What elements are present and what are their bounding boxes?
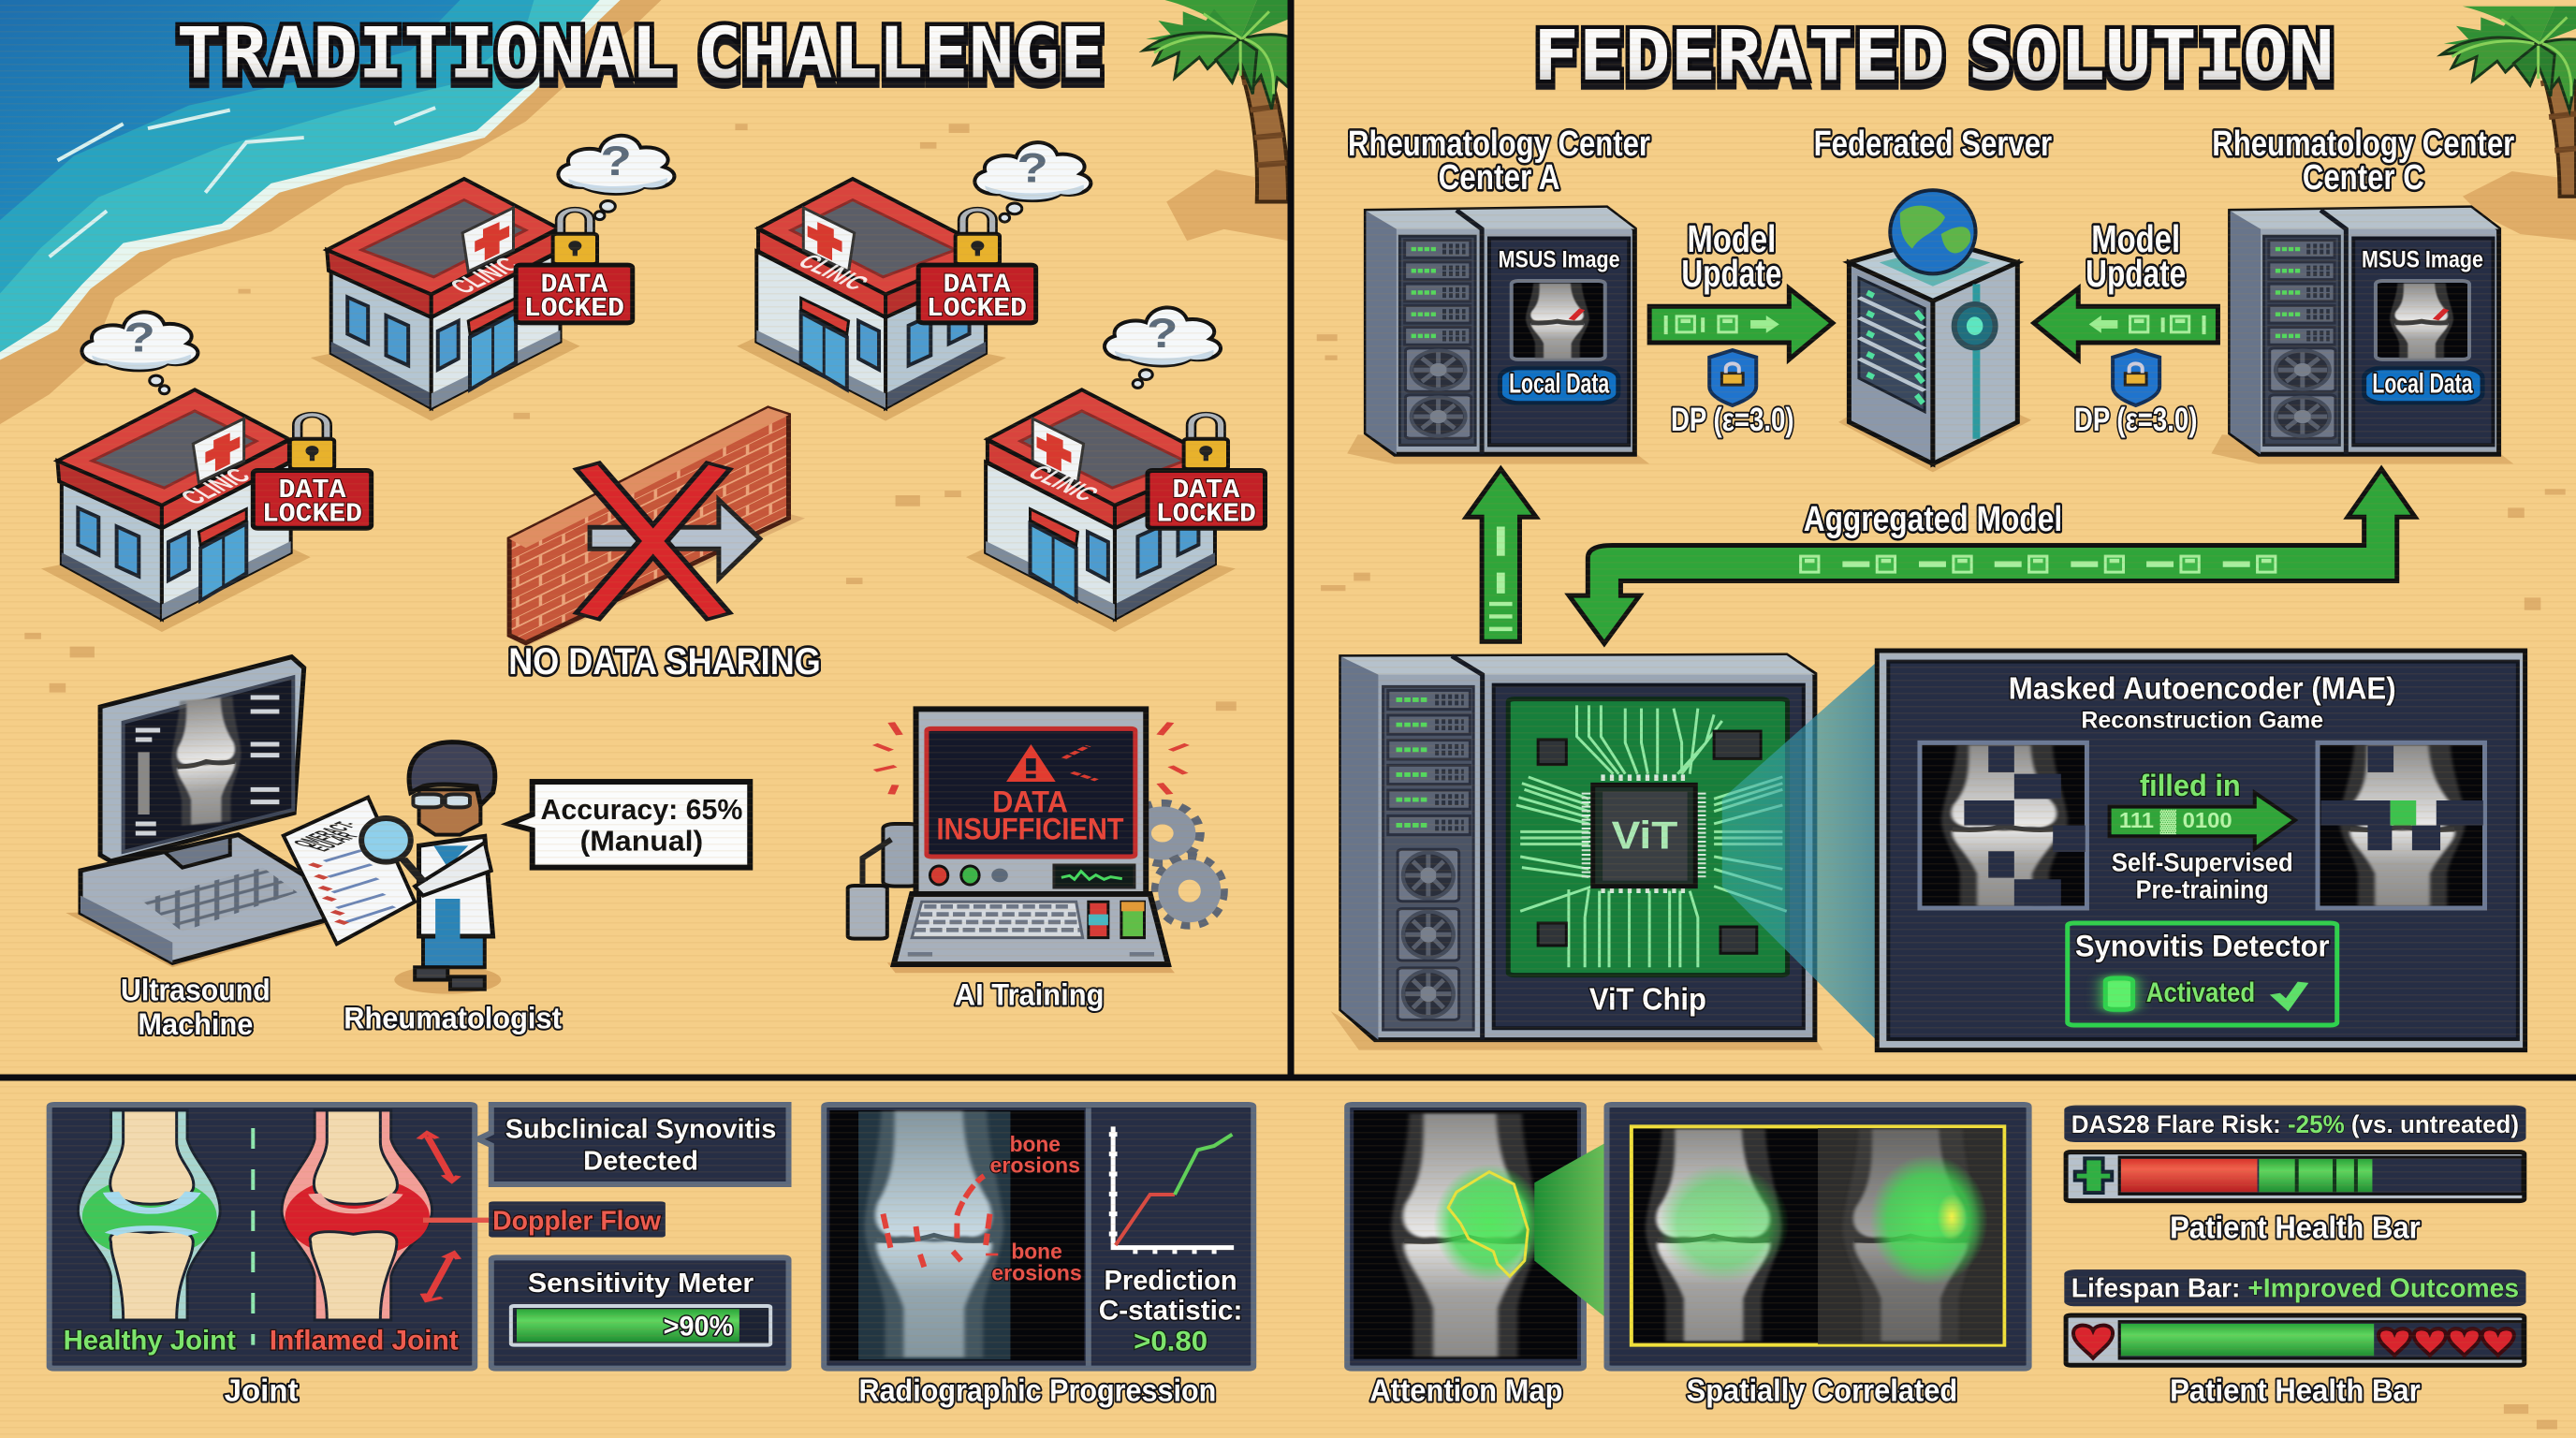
clinic: bottom left <box>41 312 372 632</box>
panel: federated solution: Rheumatology Center <box>1348 123 1650 163</box>
panel: federated solution: Model <box>1688 217 1776 260</box>
badge: data locked <box>516 265 633 324</box>
panel: federated solution: Update <box>2086 252 2186 295</box>
clinic: top right <box>737 142 1090 421</box>
thought cloud with question <box>974 142 1090 222</box>
checklist: OMERACT- <box>287 818 363 849</box>
clinic: bottom left: CLINIC <box>174 464 257 508</box>
panel: federated solution: Update <box>1681 252 1781 295</box>
patient health bar: flare risk <box>2066 1152 2525 1201</box>
AI training terminal <box>848 709 1223 973</box>
AI training terminal: INSUFFICIENT <box>936 813 1124 846</box>
panel: outcomes right <box>1347 1105 2557 1430</box>
callout: doppler flow <box>423 1201 666 1238</box>
clinic: top left: CLINIC <box>443 253 527 298</box>
patient health bar: lifespan <box>2066 1315 2525 1365</box>
prediction chart <box>1109 1126 1234 1254</box>
panel: outcomes left: Sensitivity Meter <box>528 1268 754 1299</box>
sensitivity meter: >90% <box>664 1311 733 1342</box>
panel: joint comparison: Healthy Joint <box>64 1326 236 1356</box>
text: data insufficient: DATA <box>992 785 1068 819</box>
ocean and shoreline <box>0 0 661 424</box>
beam to spatial panel <box>1534 1142 1607 1318</box>
alert sparks <box>875 723 1187 794</box>
label: right model update <box>2086 217 2186 295</box>
panel: manual workflow and AI training: Ultrasound <box>121 973 271 1006</box>
badge: data locked: DATA <box>1172 476 1239 506</box>
panel: radiographic progression: erosions <box>990 1152 1080 1177</box>
panel: outcomes right: Attention Map <box>1369 1373 1563 1408</box>
text: Prediction <box>1104 1266 1237 1296</box>
panel: masked autoencoder: Pre-training <box>2136 875 2269 903</box>
thought cloud with question <box>81 312 198 394</box>
panel: spatially correlated <box>1607 1105 2029 1369</box>
panel: manual workflow and AI training <box>66 657 1223 1041</box>
panel: outcomes right: Spatially Correlated <box>1687 1373 1957 1408</box>
padlock <box>553 210 597 264</box>
federated server with globe <box>1838 190 2031 472</box>
checklist: EULAR <box>304 830 364 854</box>
inflamed joint <box>282 1110 459 1320</box>
badge: data locked: LOCKED <box>1156 500 1256 529</box>
text: data insufficient <box>936 785 1124 846</box>
panel: masked autoencoder <box>1877 651 2525 1050</box>
synovitis detector: Activated <box>2146 977 2255 1008</box>
panel: federated solution: DP (ε=3.0) <box>2074 401 2198 437</box>
callout: accuracy: (Manual) <box>580 825 703 857</box>
arrow: aggregated model <box>1569 469 2415 643</box>
panel: federated solution: Model <box>2091 217 2180 260</box>
title: TRADITIONAL CHALLENGE <box>177 13 1105 94</box>
panel: federated solution: Federated Server <box>1814 123 2052 163</box>
panel: radiographic progression <box>824 1105 1253 1369</box>
callout: subclinical synovitis <box>478 1105 788 1184</box>
text: prediction c-statistic <box>1099 1266 1242 1357</box>
labels: bone erosions: bone <box>1011 1239 1062 1263</box>
badge: data locked <box>1148 471 1266 529</box>
server: center A: Local Data <box>1509 368 1609 399</box>
panel: radiographic progression: erosions <box>991 1260 1082 1284</box>
panel: ViT and MAE <box>1331 651 2525 1050</box>
server: center A: MSUS Image <box>1499 247 1620 272</box>
label: center A: Center A <box>1439 156 1559 197</box>
text: Radiographic Progression <box>859 1373 1216 1408</box>
server: ViT chip <box>1331 655 1822 1050</box>
sand specks <box>1317 334 2566 610</box>
arrow: reconstruction: 111 ▓ 0100 <box>2119 808 2232 834</box>
callout: subclinical synovitis: Detected <box>583 1146 698 1176</box>
server: ViT chip: ViT Chip <box>1589 981 1706 1016</box>
checklist <box>284 798 415 944</box>
clinic: bottom right: CLINIC <box>1021 461 1105 506</box>
thought cloud with question <box>558 136 674 220</box>
labels: bone erosions <box>990 1132 1082 1284</box>
badge: data locked <box>918 265 1036 324</box>
panel: federated solution <box>1317 7 2576 643</box>
badge: data locked <box>253 471 372 529</box>
badge: data locked: DATA <box>279 476 346 506</box>
thought cloud with question: ? <box>601 138 632 184</box>
reconstructed knee <box>2318 742 2485 908</box>
panel: traditional challenge <box>0 0 1288 711</box>
text: self-supervised pre-training <box>2112 848 2293 903</box>
label: left model update <box>1681 217 1781 295</box>
sensitivity meter <box>491 1257 788 1369</box>
brick wall with blocked arrow <box>509 408 805 647</box>
arrow: reconstruction <box>2110 793 2295 849</box>
sand specks <box>24 124 1237 711</box>
panel: joint comparison <box>50 1105 475 1369</box>
badge: data locked: LOCKED <box>262 500 362 529</box>
panel: manual workflow and AI training: Machine <box>138 1006 253 1041</box>
MAE heading <box>2009 671 2396 733</box>
panel: masked autoencoder: filled in <box>2140 769 2241 802</box>
text: C-statistic: <box>1099 1295 1242 1326</box>
badge: data locked: DATA <box>943 271 1011 300</box>
panel: manual workflow and AI training: Rheumatologist <box>344 1001 562 1034</box>
panel: manual workflow and AI training: Accuracy: 65% <box>540 793 742 826</box>
thought cloud with question: ? <box>124 315 155 360</box>
badge: data locked: LOCKED <box>927 294 1027 324</box>
rheumatologist <box>284 742 501 994</box>
icon: shield lock <box>2113 350 2159 405</box>
x-ray <box>865 1111 1003 1357</box>
masked knee <box>1920 742 2086 908</box>
gears <box>1125 803 1223 925</box>
label: center A <box>1348 123 1650 197</box>
panel: federated solution: Aggregated Model <box>1804 498 2062 538</box>
label: center C <box>2212 123 2514 197</box>
label: no data sharing: NO DATA SHARING <box>508 640 821 682</box>
thought cloud with question: ? <box>1147 310 1178 356</box>
label: DAS28 flare risk <box>2064 1106 2526 1142</box>
server: center C <box>2211 208 2513 464</box>
panel: outcomes left: Doppler Flow <box>492 1206 661 1236</box>
panel: outcomes left: Joint <box>225 1373 299 1408</box>
clinic: top left <box>311 136 674 421</box>
clinic: top right: CLINIC <box>791 250 875 294</box>
padlock <box>1184 415 1228 469</box>
circuit board: ViT <box>1612 814 1677 858</box>
circuit board <box>1508 699 1788 976</box>
arrow: chip up to center A <box>1466 469 1536 641</box>
thought cloud with question <box>1105 307 1221 388</box>
label: ultrasound machine <box>121 973 271 1041</box>
arrow: model update to server <box>1649 288 1833 360</box>
labels: bone erosions: bone <box>1010 1132 1061 1156</box>
panel: outcomes left <box>50 1105 1253 1408</box>
ultrasound machine <box>66 657 329 967</box>
callout: accuracy <box>509 782 750 868</box>
icon: palm tree <box>1144 0 1288 241</box>
clinic: bottom right <box>966 307 1266 632</box>
panel: federated solution: DP (ε=3.0) <box>1671 401 1794 437</box>
beam to MAE panel <box>1722 663 1876 1039</box>
server: center A <box>1347 208 1649 464</box>
panel: manual workflow and AI training: AI Training <box>955 977 1104 1011</box>
panel: attention map <box>1347 1105 1584 1369</box>
healthy joint <box>78 1110 220 1320</box>
padlock <box>290 415 334 469</box>
icon: palm tree <box>2441 7 2576 241</box>
badge: data locked: LOCKED <box>524 294 624 324</box>
arrow: model update from center C <box>2034 288 2217 360</box>
icon: shield lock <box>1709 350 1756 405</box>
padlock <box>956 210 1000 264</box>
thought cloud with question: ? <box>1017 144 1048 191</box>
panel: outcomes left: Subclinical Synovitis <box>505 1114 776 1144</box>
panel: outcomes left: Inflamed Joint <box>270 1326 459 1356</box>
text: prediction c-statistic: >0.80 <box>1134 1327 1208 1357</box>
badge: data locked: DATA <box>540 271 608 300</box>
synovitis detector <box>2068 923 2337 1025</box>
